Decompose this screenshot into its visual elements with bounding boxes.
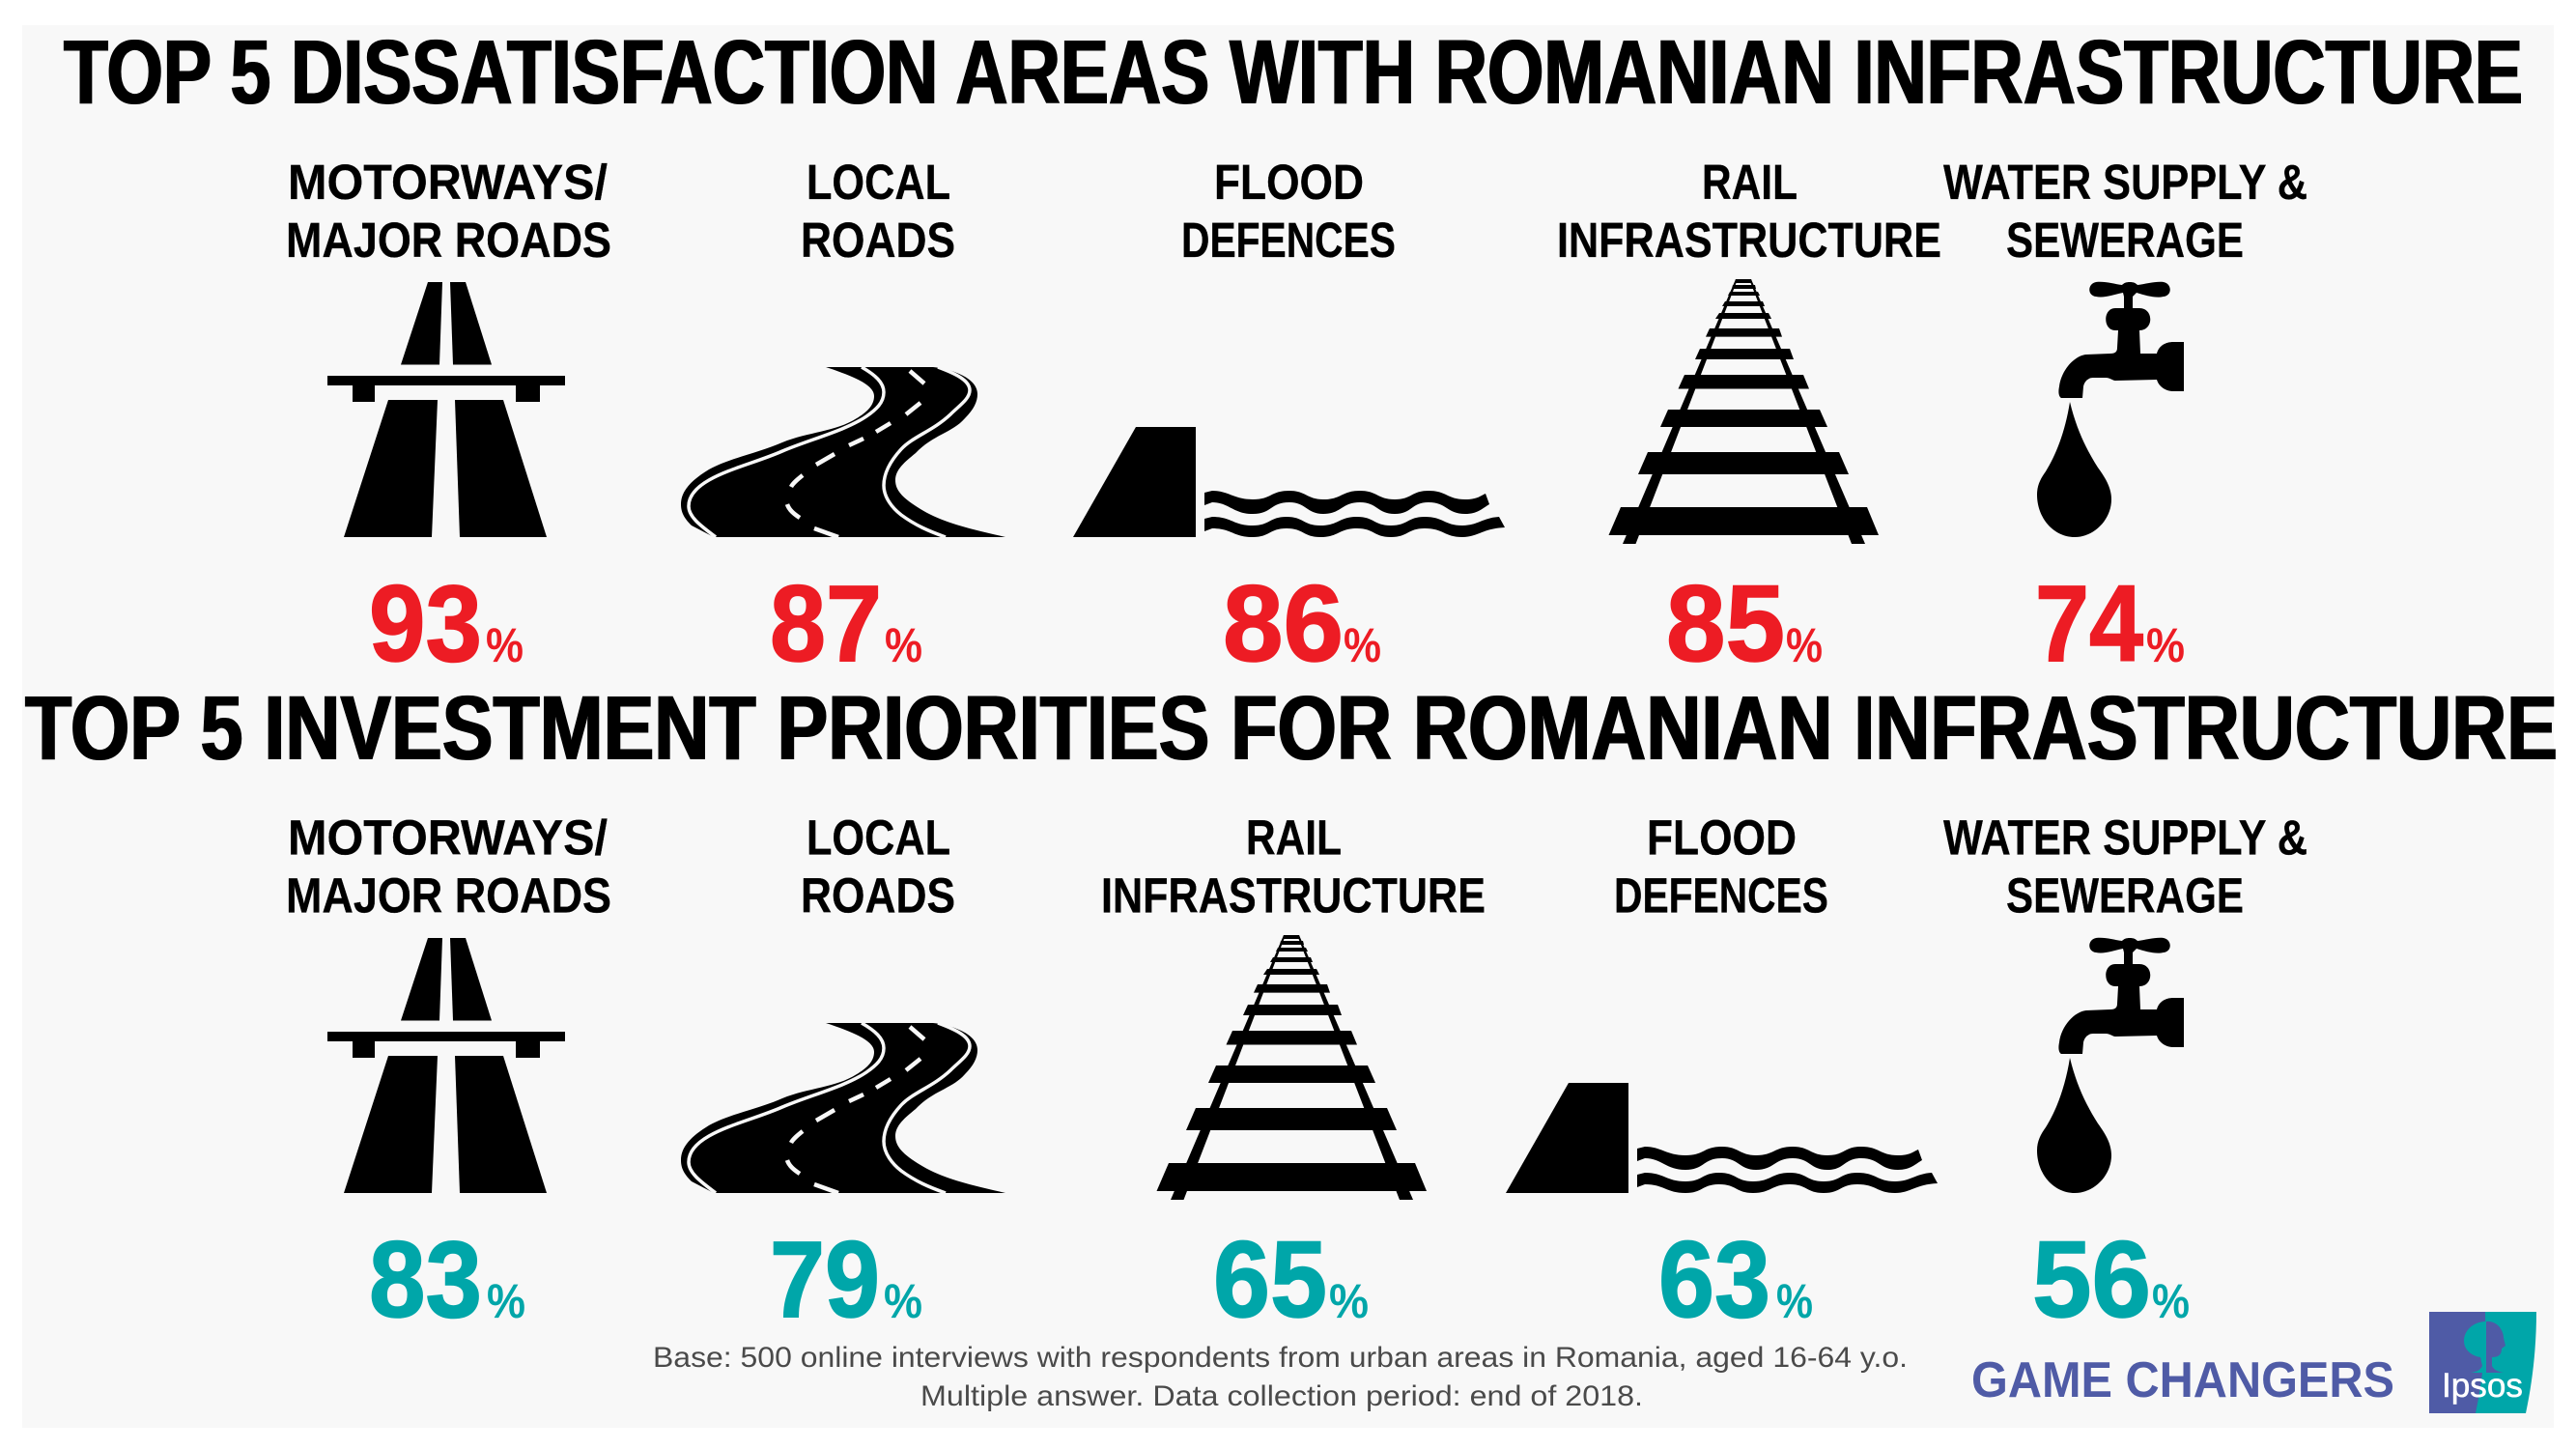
value: 85%: % <box>1786 618 1823 672</box>
label: motorways: MAJOR ROADS <box>286 213 611 268</box>
value: 93%: 93 <box>369 563 482 684</box>
label: motorways <box>286 155 611 268</box>
value: 65%: 65 <box>1213 1219 1327 1340</box>
footnote <box>653 1342 1908 1412</box>
value: 65%: % <box>1329 1274 1369 1328</box>
label: water supply and sewerage: WATER SUPPLY & <box>1943 155 2307 210</box>
label: local roads: LOCAL <box>807 155 950 210</box>
label: flood defences <box>1181 155 1396 268</box>
label: water supply and sewerage: WATER SUPPLY & <box>1943 810 2307 866</box>
column: rail infrastructure <box>1101 810 1486 1340</box>
icon: tap and drop <box>2037 938 2184 1193</box>
column: flood defences <box>1506 810 1938 1340</box>
label: rail infrastructure <box>1557 155 1941 268</box>
value: 93%: % <box>486 618 524 672</box>
label: local roads <box>801 155 955 268</box>
footnote: Base: 500 online interviews with respondents from urban areas in Romania, aged 16-64 y.o. <box>653 1342 1908 1374</box>
label: water supply and sewerage: SEWERAGE <box>2006 867 2244 923</box>
value: 56%: % <box>2152 1274 2190 1328</box>
column: water supply <box>1943 155 2307 684</box>
column: motorways <box>286 810 611 1340</box>
label: water supply and sewerage: SEWERAGE <box>2006 213 2244 268</box>
value: 83%: 83 <box>369 1219 482 1340</box>
value: 56%: 56 <box>2032 1219 2151 1340</box>
value: 86%: 86 <box>1223 563 1344 684</box>
icon: flood wall and water <box>1073 427 1505 537</box>
icon: winding road <box>681 1023 1005 1193</box>
logo: Ipsos: Ipsos <box>2442 1367 2523 1405</box>
column: water supply <box>1943 810 2307 1340</box>
label: flood defences: DEFENCES <box>1181 213 1396 268</box>
icon: flood wall and water <box>1506 1083 1938 1193</box>
column: rail infrastructure <box>1557 155 1941 684</box>
value: 79%: 79 <box>770 1219 880 1340</box>
value: 74%: % <box>2146 618 2185 672</box>
icon: motorway <box>327 938 565 1193</box>
icon: railway track <box>1609 279 1879 544</box>
value: 63%: % <box>1776 1274 1813 1328</box>
brand: Game Changers: GAME CHANGERS <box>1971 1352 2394 1408</box>
panel: top 5 investment priorities <box>25 677 2558 1340</box>
label: motorways <box>286 810 611 923</box>
label: rail infrastructure: RAIL <box>1246 810 1342 866</box>
icon: tap and drop <box>2037 282 2184 537</box>
label: rail infrastructure: INFRASTRUCTURE <box>1557 213 1941 268</box>
label: flood defences: FLOOD <box>1214 155 1364 210</box>
footnote: Multiple answer. Data collection period: end of 2018. <box>920 1380 1643 1412</box>
logo: Ipsos <box>2429 1312 2536 1413</box>
value: 79%: % <box>884 1274 922 1328</box>
label: rail infrastructure <box>1101 810 1486 923</box>
label: flood defences: FLOOD <box>1647 810 1797 866</box>
label: water supply and sewerage <box>1943 810 2307 923</box>
label: rail infrastructure: INFRASTRUCTURE <box>1101 867 1486 923</box>
label: motorways: MOTORWAYS/ <box>288 810 608 866</box>
label: motorways: MOTORWAYS/ <box>288 155 608 210</box>
label: flood defences: DEFENCES <box>1614 867 1828 923</box>
panel: top 5 dissatisfaction areas <box>64 21 2523 684</box>
label: motorways: MAJOR ROADS <box>286 867 611 923</box>
value: 74%: 74 <box>2035 563 2143 684</box>
label: local roads: LOCAL <box>807 810 950 866</box>
label: flood defences <box>1614 810 1828 923</box>
column: local roads <box>681 810 1005 1340</box>
value: 85%: 85 <box>1666 563 1785 684</box>
label: water supply and sewerage <box>1943 155 2307 268</box>
value: 86%: % <box>1344 618 1381 672</box>
column: local roads <box>681 155 1005 684</box>
value: 83%: % <box>487 1274 525 1328</box>
icon: railway track <box>1157 935 1427 1200</box>
icon: motorway <box>327 282 565 537</box>
column: flood defences <box>1073 155 1505 684</box>
icon: winding road <box>681 367 1005 537</box>
value: 87%: % <box>885 618 922 672</box>
label: local roads <box>801 810 955 923</box>
value: 87%: 87 <box>770 563 882 684</box>
label: local roads: ROADS <box>801 867 955 923</box>
value: 63%: 63 <box>1658 1219 1770 1340</box>
label: rail infrastructure: RAIL <box>1702 155 1798 210</box>
column: motorways <box>286 155 611 684</box>
label: local roads: ROADS <box>801 213 955 268</box>
